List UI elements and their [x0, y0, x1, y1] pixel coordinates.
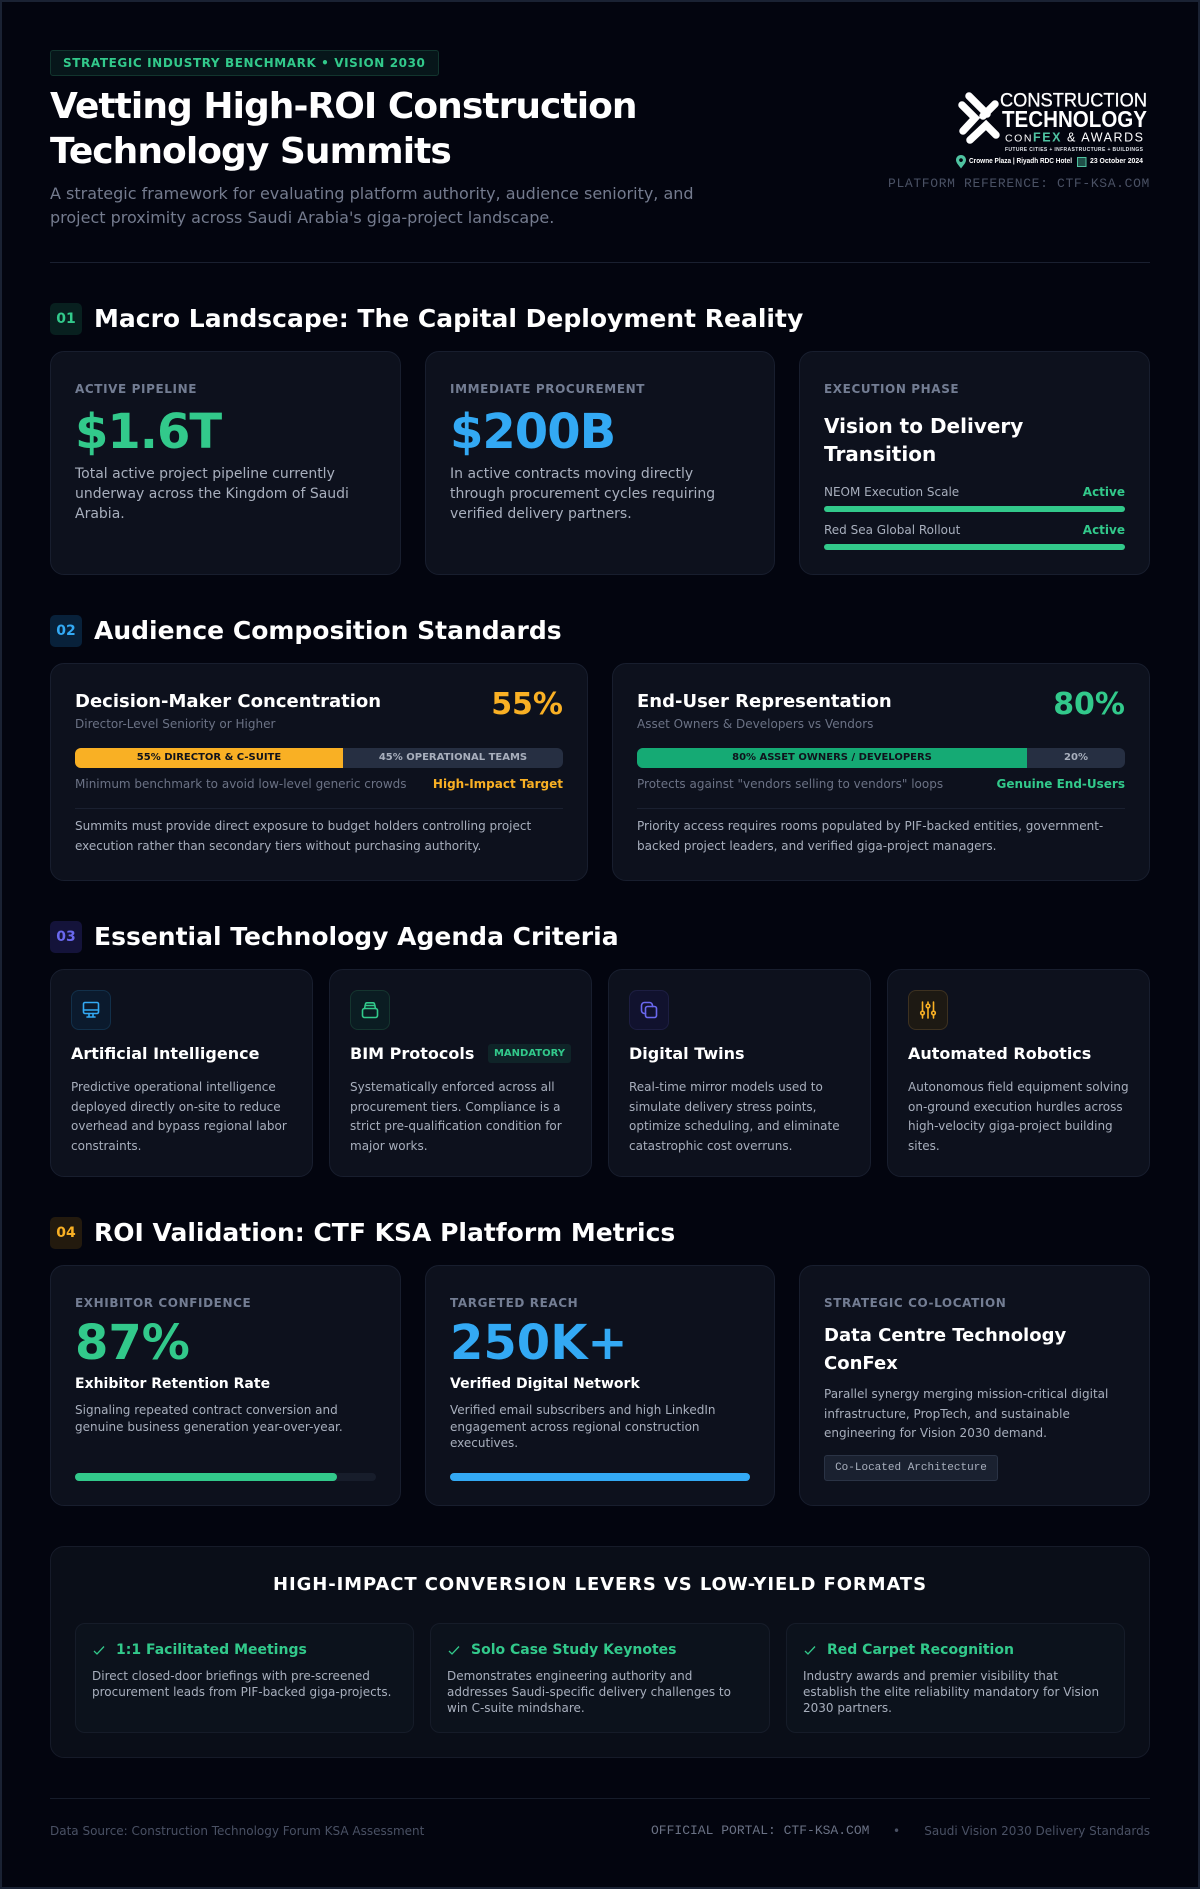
description [908, 1080, 1129, 1153]
label: IMMEDIATE PROCUREMENT [450, 382, 645, 396]
subtitle: project proximity across Saudi Arabia's giga-project landscape. [50, 208, 554, 227]
body text: backed project leaders, and verified giga-project managers. [637, 839, 996, 853]
icon: layered box [350, 990, 390, 1030]
segment: directors: 55% DIRECTOR & C-SUITE [137, 752, 281, 763]
stacked bar [75, 748, 563, 768]
label: EXHIBITOR CONFIDENCE [75, 1296, 251, 1310]
section number 04: 04 [56, 1225, 76, 1241]
description: Verified email subscribers and high LinkedIn [450, 1403, 715, 1417]
section number 01: 01 [56, 311, 76, 327]
benchmark note: Minimum benchmark to avoid low-level generic crowds [75, 777, 407, 791]
panel: end-user representation [612, 663, 1150, 881]
description [71, 1080, 287, 1153]
heading: Red Carpet Recognition [827, 1642, 1014, 1658]
description: underway across the Kingdom of Saudi [75, 486, 349, 502]
description: sites. [908, 1139, 940, 1153]
section number 03 [50, 921, 82, 953]
description: constraints. [71, 1139, 142, 1153]
panel: immediate procurement [425, 351, 775, 575]
description [629, 1080, 840, 1153]
progress fill [75, 1473, 337, 1481]
description: Arabia. [75, 506, 125, 522]
platform reference: PLATFORM REFERENCE: CTF-KSA.COM [888, 176, 1150, 190]
footer: data source: Data Source: Construction Technology Forum KSA Assessment [50, 1824, 424, 1838]
Red Sea row: Red Sea Global Rollout [824, 523, 960, 537]
logo mark [962, 96, 996, 140]
section number 03: 03 [56, 929, 76, 945]
description: high-velocity giga-project building [908, 1119, 1113, 1133]
lever: solo keynotes [430, 1623, 770, 1733]
label: ACTIVE PIPELINE [75, 382, 197, 396]
description [350, 1080, 562, 1153]
heading: Solo Case Study Keynotes [471, 1642, 677, 1658]
description: win C-suite mindshare. [447, 1701, 585, 1715]
description: infrastructure, PropTech, and sustainable [824, 1406, 1070, 1420]
target: High-Impact Target [433, 777, 563, 791]
description: executives. [450, 1436, 518, 1450]
icon: sliders [908, 990, 948, 1030]
description [447, 1669, 731, 1715]
panel: active pipeline [50, 351, 401, 575]
heading: Artificial Intelligence [71, 1044, 259, 1063]
heading: Data Centre Technology [824, 1325, 1066, 1346]
panel: automated robotics [887, 969, 1150, 1177]
segment: operational: 45% OPERATIONAL TEAMS [379, 752, 527, 763]
description: verified delivery partners. [450, 506, 632, 522]
target: Genuine End-Users [997, 777, 1125, 791]
description: Real-time mirror models used to [629, 1080, 823, 1094]
description: Parallel synergy merging mission-critical digital [824, 1387, 1108, 1401]
badge: strategic benchmark [50, 50, 439, 76]
icon: copy [629, 990, 669, 1030]
panel: digital twins [608, 969, 871, 1177]
footer: bullet: • [893, 1824, 900, 1838]
check icon [448, 1646, 460, 1655]
heading: End-User Representation [637, 691, 892, 712]
description [450, 1403, 715, 1450]
Red Sea bar [824, 544, 1125, 550]
description: genuine business generation year-over-year. [75, 1420, 343, 1434]
progress bar [75, 1473, 376, 1481]
description: overhead and bypass regional labor [71, 1119, 287, 1133]
panel: exhibitor confidence [50, 1265, 401, 1506]
metric: $1.6T [75, 404, 221, 460]
heading: Digital Twins [629, 1044, 745, 1063]
note: Protects against "vendors selling to vendors" loops [637, 777, 943, 791]
lever: red carpet [786, 1623, 1125, 1733]
description: Autonomous field equipment solving [908, 1080, 1129, 1094]
title [50, 86, 637, 172]
heading: Automated Robotics [908, 1044, 1091, 1063]
logo: Construction Technology ConFEX and Awards: FUTURE CITIES + INFRASTRUCTURE + BUILDINGS [1005, 147, 1144, 153]
section heading 02: Audience Composition Standards [94, 616, 562, 645]
heading: Vision to Delivery [824, 414, 1023, 438]
metric: 80% [1053, 687, 1125, 722]
metric: $200B [450, 404, 615, 460]
description: engagement across regional construction [450, 1420, 700, 1434]
footer: standards: Saudi Vision 2030 Delivery Standards [924, 1824, 1150, 1838]
description: catastrophic cost overruns. [629, 1139, 792, 1153]
panel: BIM protocols [329, 969, 592, 1177]
description: establish the elite reliability mandatory for Vision [803, 1685, 1099, 1699]
check icon [804, 1646, 816, 1655]
panel: decision-maker concentration [50, 663, 588, 881]
heading [824, 414, 1023, 466]
description: Predictive operational intelligence [71, 1080, 276, 1094]
panel: conversion levers [50, 1546, 1150, 1758]
body text: execution rather than secondary tiers without purchasing authority. [75, 839, 481, 853]
section heading 01: Macro Landscape: The Capital Deployment Reality [94, 304, 803, 333]
tag: Co-Located Architecture [835, 1462, 987, 1474]
description [92, 1669, 391, 1699]
segment: owners: 80% ASSET OWNERS / DEVELOPERS [732, 752, 932, 763]
description: deployed directly on-site to reduce [71, 1100, 281, 1114]
panel: targeted reach [425, 1265, 775, 1506]
description: Systematically enforced across all [350, 1080, 555, 1094]
lever: facilitated meetings [75, 1623, 414, 1733]
body text [637, 819, 1103, 853]
section number 02: 02 [56, 623, 76, 639]
description: optimize scheduling, and eliminate [629, 1119, 840, 1133]
description: engineering for Vision 2030 demand. [824, 1426, 1047, 1440]
subtitle: A strategic framework for evaluating platform authority, audience seniority, and [50, 184, 694, 203]
heading: 1:1 Facilitated Meetings [116, 1642, 307, 1658]
panel: strategic co-location [799, 1265, 1150, 1506]
metric: 55% [491, 687, 563, 722]
description: Signaling repeated contract conversion and [75, 1403, 338, 1417]
heading: Decision-Maker Concentration [75, 691, 381, 712]
description: Direct closed-door briefings with pre-screened [92, 1669, 370, 1683]
heading: ConFex [824, 1353, 898, 1374]
description: addresses Saudi-specific delivery challenges to [447, 1685, 731, 1699]
metric: 87% [75, 1315, 190, 1371]
body text: Summits must provide direct exposure to budget holders controlling project [75, 819, 531, 833]
description: Total active project pipeline currently [75, 466, 335, 482]
segment: owners [637, 748, 1027, 768]
metric: 250K+ [450, 1315, 628, 1371]
title: Vetting High-ROI Construction [50, 86, 637, 127]
section heading 04: ROI Validation: CTF KSA Platform Metrics [94, 1218, 675, 1247]
body text [75, 819, 531, 853]
NEOM bar [824, 506, 1125, 512]
heading: Transition [824, 442, 936, 466]
description: major works. [350, 1139, 428, 1153]
description [450, 466, 715, 522]
description [75, 1403, 343, 1434]
section number 01 [50, 303, 82, 335]
NEOM row: NEOM Execution Scale [824, 485, 959, 499]
subheading: Asset Owners & Developers vs Vendors [637, 717, 873, 731]
description: strict pre-qualification condition for [350, 1119, 562, 1133]
heading [824, 1325, 1066, 1374]
segment: vendors: 20% [1064, 752, 1088, 763]
badge: strategic benchmark: STRATEGIC INDUSTRY BENCHMARK • VISION 2030 [63, 56, 426, 70]
footer: portal: OFFICIAL PORTAL: CTF-KSA.COM [651, 1822, 869, 1838]
icon: monitor [71, 990, 111, 1030]
section heading 03: Essential Technology Agenda Criteria [94, 922, 619, 951]
description: In active contracts moving directly [450, 466, 693, 482]
tag [824, 1455, 998, 1481]
segment: directors [75, 748, 343, 768]
levers heading: HIGH-IMPACT CONVERSION LEVERS VS LOW-YIELD FORMATS [273, 1574, 927, 1595]
mandatory badge: MANDATORY [494, 1048, 565, 1059]
subheading: Verified Digital Network [450, 1376, 640, 1392]
label: STRATEGIC CO-LOCATION [824, 1296, 1006, 1310]
panel: execution phase [799, 351, 1150, 575]
logo: Construction Technology ConFEX and Awards [956, 90, 1147, 168]
description: through procurement cycles requiring [450, 486, 715, 502]
Red Sea status: Active [1083, 523, 1125, 537]
section number 02 [50, 615, 82, 647]
heading: BIM Protocols [350, 1044, 474, 1063]
mandatory badge [488, 1044, 571, 1063]
label: EXECUTION PHASE [824, 382, 959, 396]
description: Industry awards and premier visibility that [803, 1669, 1058, 1683]
description: procurement tiers. Compliance is a [350, 1100, 561, 1114]
label: TARGETED REACH [450, 1296, 578, 1310]
description [74, 466, 349, 522]
logo: Construction Technology ConFEX and Awards: 23 October 2024 [1090, 158, 1143, 165]
logo: Construction Technology ConFEX and Awards: CONFEX & AWARDS [1005, 130, 1143, 144]
description: simulate delivery stress points, [629, 1100, 816, 1114]
panel: artificial intelligence [50, 969, 313, 1177]
progress bar [450, 1473, 750, 1481]
title: Technology Summits [50, 131, 451, 172]
subtitle [50, 184, 694, 227]
logo: Construction Technology ConFEX and Awards: Crowne Plaza | Riyadh RDC Hotel [969, 158, 1072, 165]
NEOM status: Active [1083, 485, 1125, 499]
description: 2030 partners. [803, 1701, 892, 1715]
description: on-ground execution hurdles across [908, 1100, 1123, 1114]
description: procurement leads from PIF-backed giga-projects. [92, 1685, 391, 1699]
description [824, 1387, 1108, 1440]
check icon [94, 1646, 104, 1655]
subheading: Director-Level Seniority or Higher [75, 717, 275, 731]
section number 04 [50, 1217, 82, 1249]
stacked bar [637, 748, 1125, 768]
body text: Priority access requires rooms populated by PIF-backed entities, government- [637, 819, 1103, 833]
description: Demonstrates engineering authority and [447, 1669, 692, 1683]
subheading: Exhibitor Retention Rate [75, 1376, 270, 1392]
description [803, 1669, 1099, 1715]
